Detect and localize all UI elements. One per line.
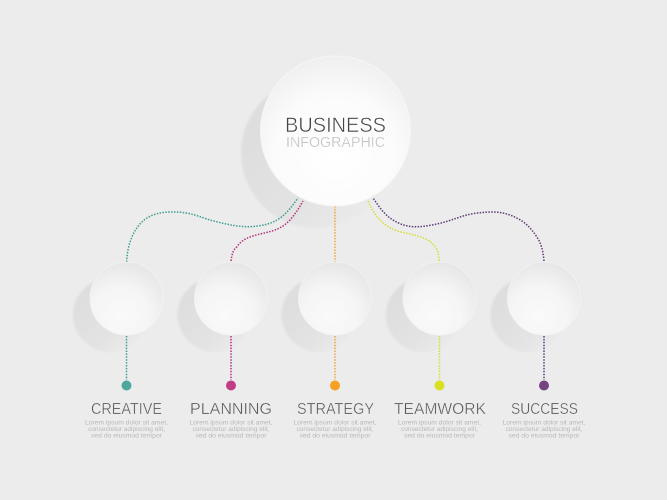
node: strategy	[282, 262, 377, 440]
node: planning	[178, 262, 273, 440]
description: consectetur adipiscing elit,	[296, 427, 374, 433]
description: sed do eiusmod tempor	[196, 434, 266, 440]
description: Lorem ipsum dolor sit amet,	[502, 420, 586, 426]
main circle shadow	[241, 78, 391, 228]
label: SUCCESS	[511, 401, 578, 418]
circle	[194, 262, 268, 335]
description: Lorem ipsum dolor sit amet,	[398, 420, 481, 426]
node: teamwork	[386, 262, 487, 440]
title: business: BUSINESS	[285, 114, 386, 137]
stem	[438, 336, 440, 380]
stem	[126, 336, 128, 380]
label: PLANNING	[190, 401, 272, 418]
shadow	[386, 278, 460, 352]
main circle	[260, 56, 410, 206]
description: sed do eiusmod tempor	[508, 434, 580, 440]
stem	[334, 336, 336, 380]
dot	[434, 380, 444, 390]
description: Lorem ipsum dolor sit amet,	[85, 420, 168, 426]
dot	[330, 380, 340, 390]
circle	[298, 262, 372, 335]
connectors from main circle to nodes	[127, 198, 544, 262]
shadow	[282, 278, 356, 352]
connector: teamwork	[368, 201, 439, 261]
description: sed do eiusmod tempor	[300, 434, 370, 440]
description: consectetur adipiscing elit,	[88, 427, 165, 433]
circle	[403, 262, 476, 335]
connector: strategy	[334, 206, 336, 262]
connector: creative	[127, 198, 298, 262]
stem	[230, 336, 232, 380]
label: TEAMWORK	[394, 401, 487, 418]
shadow	[490, 278, 564, 352]
dot	[226, 380, 236, 390]
connector: planning	[231, 201, 303, 261]
description: consectetur adipiscing elit,	[401, 427, 478, 433]
description: sed do eiusmod tempor	[404, 434, 475, 440]
stem	[543, 336, 545, 380]
circle	[508, 262, 580, 335]
node: success	[490, 262, 586, 440]
shadow	[73, 278, 147, 352]
shadow	[178, 278, 252, 352]
label: STRATEGY	[297, 401, 374, 418]
subtitle: infographic: INFOGRAPHIC	[286, 135, 385, 151]
dot	[539, 380, 549, 390]
node: creative	[73, 262, 168, 440]
description: consectetur adipiscing elit,	[192, 427, 270, 433]
connector: success	[373, 198, 544, 261]
label: CREATIVE	[91, 401, 162, 418]
description: consectetur adipiscing elit,	[506, 427, 583, 433]
description: Lorem ipsum dolor sit amet,	[294, 420, 377, 426]
description: Lorem ipsum dolor sit amet,	[190, 420, 273, 426]
circle	[90, 262, 163, 335]
description: sed do eiusmod tempor	[91, 434, 162, 440]
dot	[122, 380, 132, 390]
